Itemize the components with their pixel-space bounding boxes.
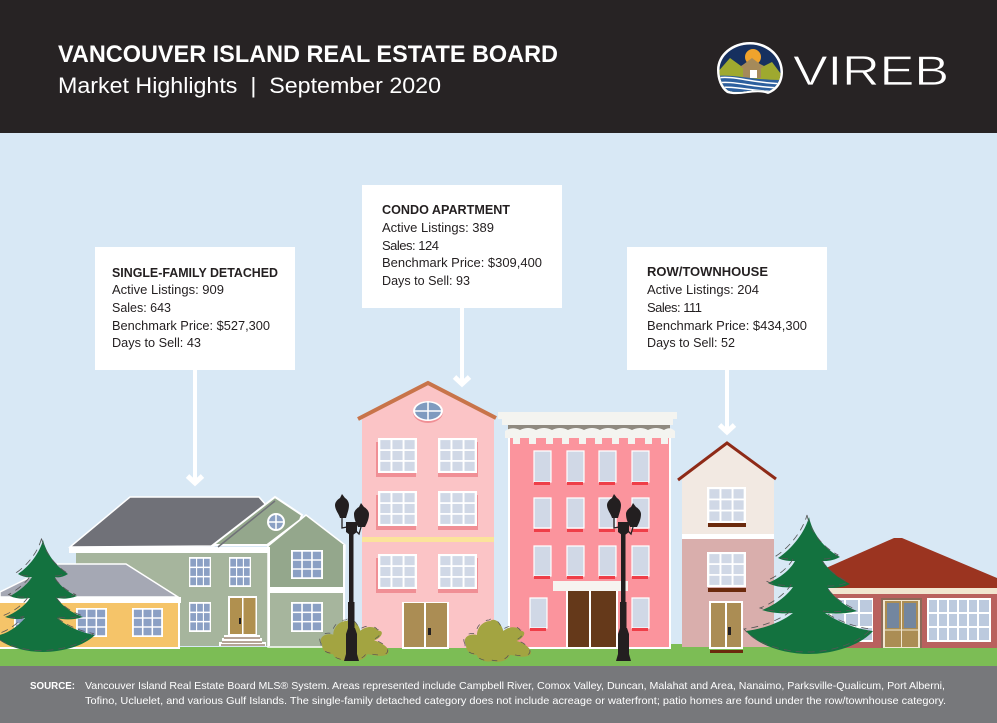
wall xyxy=(830,594,997,648)
callout: condo apartment: Active Listings: 389 xyxy=(382,220,494,235)
awning xyxy=(553,581,628,591)
attic oval window xyxy=(413,401,443,423)
roof xyxy=(826,538,997,588)
callout: condo apartment: Sales: 124 xyxy=(382,238,439,253)
source label: SOURCE: xyxy=(30,680,75,692)
window sills xyxy=(530,482,648,631)
callout: single-family detached: Days to Sell: 43 xyxy=(112,335,201,350)
main roof xyxy=(70,497,266,547)
arrow: to single-family house xyxy=(188,370,202,483)
header band xyxy=(0,0,997,133)
cornice xyxy=(498,412,677,419)
source text: Vancouver Island Real Estate Board MLS® System. Areas represented include Campbell River, Comox Valley, Duncan, Malahat and Area, Nanaimo, Parksville-Qualicum, Port Alberni, xyxy=(85,680,945,692)
windows xyxy=(530,451,649,628)
tree: right xyxy=(744,515,873,654)
callout: condo apartment: Days to Sell: 93 xyxy=(382,273,470,288)
logo: VIREB xyxy=(716,42,949,96)
bungalow xyxy=(826,538,997,648)
bush: right xyxy=(464,619,531,662)
callout: condo apartment: CONDO APARTMENT xyxy=(382,203,510,217)
main body xyxy=(76,551,269,646)
steps xyxy=(219,635,266,646)
entry door xyxy=(881,598,922,648)
arrow: to townhouse xyxy=(720,370,734,432)
windows xyxy=(707,487,746,523)
red brick building xyxy=(498,412,677,649)
title: VANCOUVER ISLAND REAL ESTATE BOARD xyxy=(58,41,558,68)
logo emblem xyxy=(716,42,784,96)
tree: left xyxy=(0,538,95,652)
callout: row/townhouse: Sales: 111 xyxy=(647,300,702,315)
bush: left xyxy=(320,619,389,661)
roof xyxy=(358,383,496,419)
condo apartment building xyxy=(358,383,496,649)
yellow strip xyxy=(362,537,494,542)
windows xyxy=(189,557,211,587)
lamp post: left xyxy=(335,494,369,661)
callout: single-family detached: Benchmark Price: $527,300 xyxy=(112,318,270,333)
single-family house xyxy=(69,497,345,647)
callout: single-family detached: SINGLE-FAMILY DETACHED xyxy=(112,266,278,280)
source footer xyxy=(0,666,997,723)
callout: row/townhouse: Benchmark Price: $434,300 xyxy=(647,318,807,333)
right window xyxy=(927,598,991,642)
door xyxy=(709,601,743,649)
subtitle: Market Highlights | September 2020 xyxy=(58,73,441,98)
door xyxy=(402,602,449,649)
callout: condo apartment: Benchmark Price: $309,400 xyxy=(382,255,542,270)
callout: row/townhouse: ROW/TOWNHOUSE xyxy=(647,265,768,279)
door xyxy=(566,591,618,648)
callout: single-family detached: Sales: 643 xyxy=(112,300,171,315)
yellow wing xyxy=(0,564,181,649)
door xyxy=(228,596,257,635)
callout: row/townhouse xyxy=(627,247,827,370)
callout: row/townhouse: Days to Sell: 52 xyxy=(647,335,735,350)
lamp post: right xyxy=(607,494,641,661)
sky background xyxy=(0,133,997,666)
window shadows xyxy=(376,442,478,593)
center gable xyxy=(213,497,302,545)
callout: row/townhouse: Active Listings: 204 xyxy=(647,282,759,297)
windows xyxy=(378,438,417,473)
pink wall xyxy=(362,384,494,648)
source footer: Tofino, Ucluelet, and various Gulf Islands. The single-family detached category does not include acreage or waterfront; patio homes are found under the row/townhouse category. xyxy=(85,695,946,707)
right wing xyxy=(268,515,345,647)
ground xyxy=(0,644,997,666)
callout: condo apartment xyxy=(362,185,562,308)
arrow: to condo xyxy=(454,308,470,384)
roof xyxy=(678,443,776,480)
callout: single-family detached: Active Listings: 909 xyxy=(112,282,224,297)
logo wordmark: VIREB xyxy=(793,47,949,94)
callout: single-family detached xyxy=(95,247,295,370)
left window xyxy=(830,598,873,642)
townhouse xyxy=(678,443,776,653)
